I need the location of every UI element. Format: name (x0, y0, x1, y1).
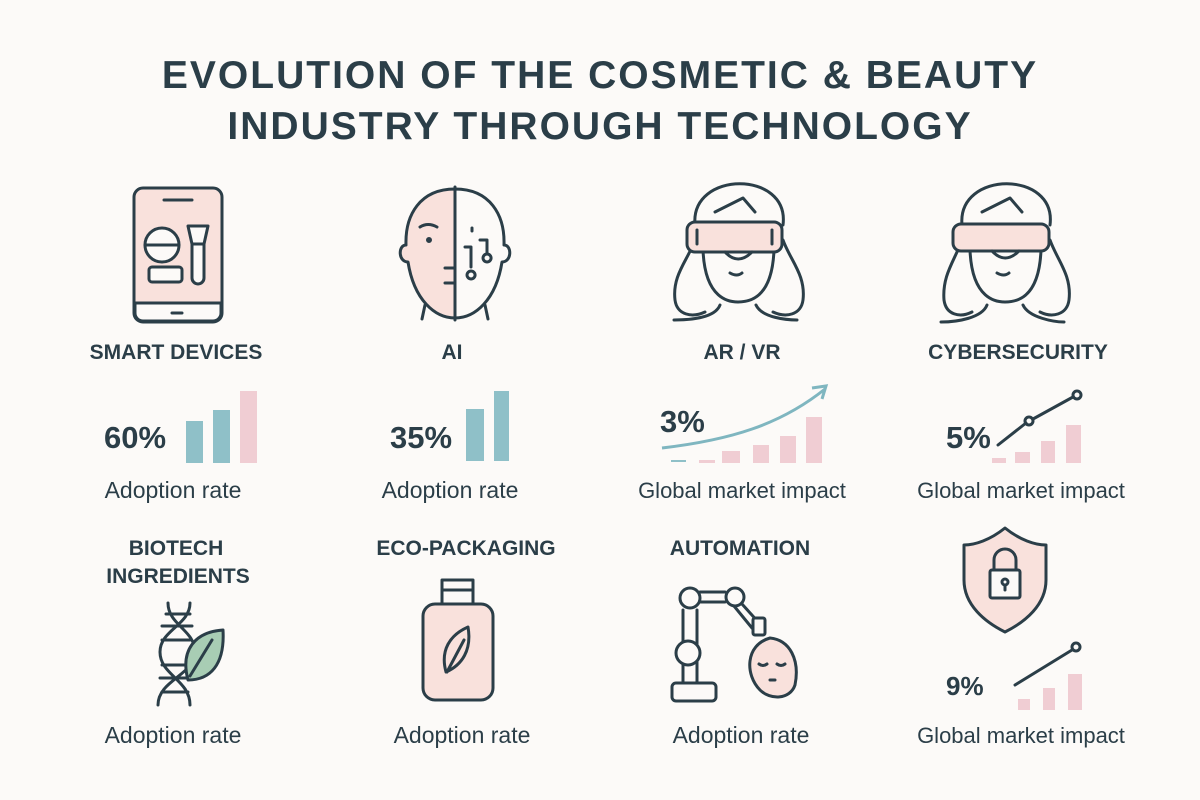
heading: SMART DEVICES (90, 341, 262, 364)
bar chart: 35% (390, 420, 452, 455)
bar chart (104, 391, 257, 463)
panel: AR/VR: Global market impact (638, 478, 846, 503)
title: INDUSTRY THROUGH TECHNOLOGY (227, 105, 973, 148)
icon: DNA with leaf (158, 603, 223, 705)
panel: AR/VR (638, 184, 846, 503)
panel: AR/VR: AR / VR (703, 341, 781, 364)
title: EVOLUTION OF THE COSMETIC & BEAUTY (162, 54, 1038, 97)
bar chart: 60% (104, 420, 166, 455)
icon: VR headset woman (674, 184, 803, 320)
panel: smart devices: Adoption rate (105, 477, 241, 503)
panel: AI: Adoption rate (382, 477, 518, 503)
panel: cybersecurity (917, 184, 1125, 503)
icon: bottle (423, 580, 493, 700)
chart: curve with bars: 3% (660, 404, 705, 439)
panel: biotech: BIOTECH (129, 537, 223, 560)
chart: curve with bars (660, 386, 826, 463)
panel: cybersecurity: CYBERSECURITY (928, 341, 1108, 364)
panel: cybersecurity shield: Global market impact (917, 723, 1125, 748)
line chart: 5% (946, 420, 991, 455)
panel: eco-packaging (376, 537, 556, 748)
panel: automation: AUTOMATION (670, 537, 810, 560)
panel: AI (382, 187, 518, 503)
panel: smart devices (90, 188, 262, 503)
panel: eco-packaging: Adoption rate (394, 722, 530, 748)
line chart (946, 643, 1082, 710)
panel: eco-packaging: ECO-PACKAGING (376, 537, 556, 560)
title (162, 54, 1038, 148)
icon: shield with lock (964, 528, 1046, 632)
panel: biotech: INGREDIENTS (106, 565, 250, 588)
panel: biotech (105, 537, 250, 748)
panel: cybersecurity: Global market impact (917, 478, 1125, 503)
icon: AI face (400, 187, 510, 320)
line chart: 9% (946, 671, 984, 701)
bar chart (390, 391, 509, 461)
line chart (946, 391, 1081, 463)
icon: robot arm with face (672, 588, 796, 701)
icon: smartphone (134, 188, 222, 322)
panel: AI: AI (442, 341, 462, 364)
panel: cybersecurity shield (917, 528, 1125, 748)
panel: automation: Adoption rate (673, 722, 809, 748)
panel: automation (670, 537, 810, 748)
icon: VR headset woman (941, 184, 1069, 322)
panel: biotech: Adoption rate (105, 722, 241, 748)
